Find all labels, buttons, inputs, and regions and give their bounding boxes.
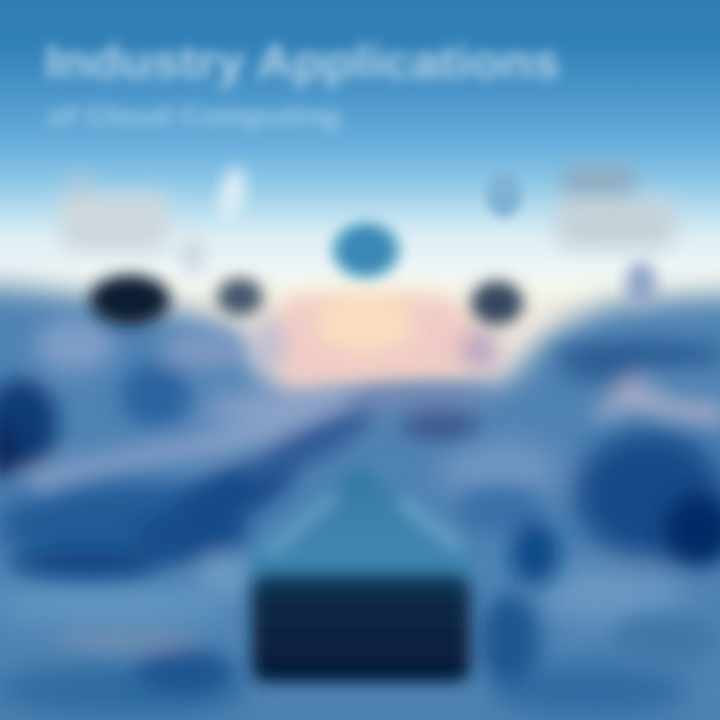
broad cloud tones xyxy=(0,388,720,716)
text: left block label: Cloud Data xyxy=(66,222,157,242)
box body xyxy=(252,574,470,682)
peach glow over clouds xyxy=(252,299,500,388)
panel: right info block xyxy=(558,168,677,248)
icon: central box with pitched top xyxy=(250,462,472,682)
cloud sea base xyxy=(0,284,720,720)
roof highlights xyxy=(268,478,460,553)
icon: small dark left node xyxy=(217,278,263,316)
sunset glow xyxy=(260,295,480,395)
icon: right tower xyxy=(626,261,656,309)
icon: dark right node xyxy=(471,281,523,325)
cloud sea ridges xyxy=(0,317,720,694)
icon: pale top marker xyxy=(214,165,250,225)
icon: top right blue dot xyxy=(486,171,522,217)
icon: pale left marker xyxy=(179,235,207,275)
lower cloud base xyxy=(0,430,720,720)
box roof xyxy=(250,462,472,585)
panel: left info block xyxy=(62,175,167,251)
text: right block label: Cloud Storage xyxy=(562,218,677,238)
subtitle: of Cloud Computing xyxy=(48,101,340,131)
title: Industry Applications xyxy=(45,35,560,88)
icon: central blue cloud xyxy=(330,220,402,280)
icon: dark left node xyxy=(90,275,170,325)
